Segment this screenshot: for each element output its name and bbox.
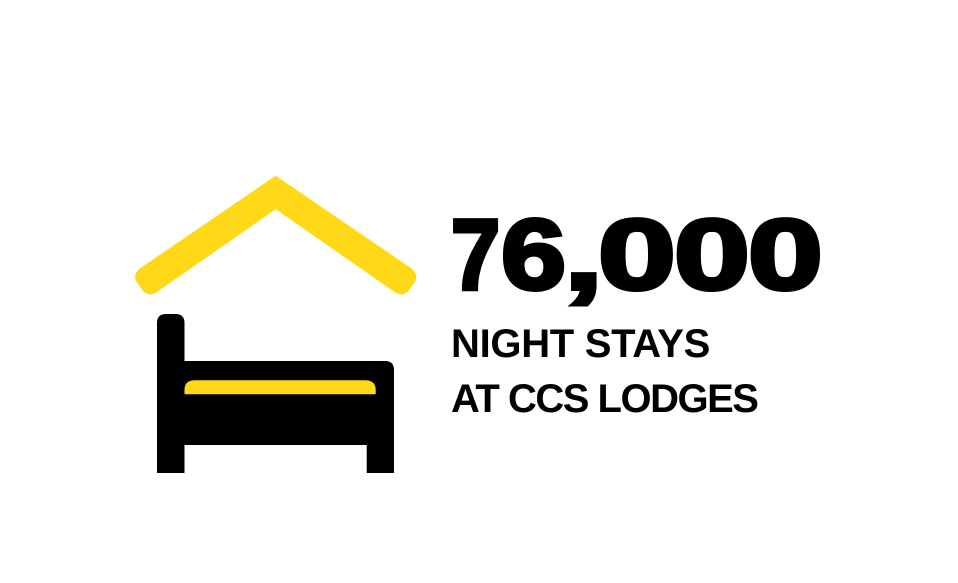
icon: yellow roof	[135, 176, 416, 294]
icon: yellow mattress	[184, 380, 376, 394]
big number: ,	[564, 199, 603, 311]
icon: bed	[157, 314, 394, 473]
big number: 0	[674, 199, 750, 311]
big number: 6	[501, 199, 566, 311]
caption	[451, 322, 758, 420]
big number: 0	[748, 199, 823, 311]
caption line 1: NIGHT STAYS	[451, 322, 710, 366]
icon: bed under roof	[135, 176, 416, 473]
caption line 2: AT CCS LODGES	[451, 376, 757, 420]
big number: 0	[598, 199, 676, 311]
big number: 7	[450, 199, 500, 311]
big number	[450, 199, 823, 311]
